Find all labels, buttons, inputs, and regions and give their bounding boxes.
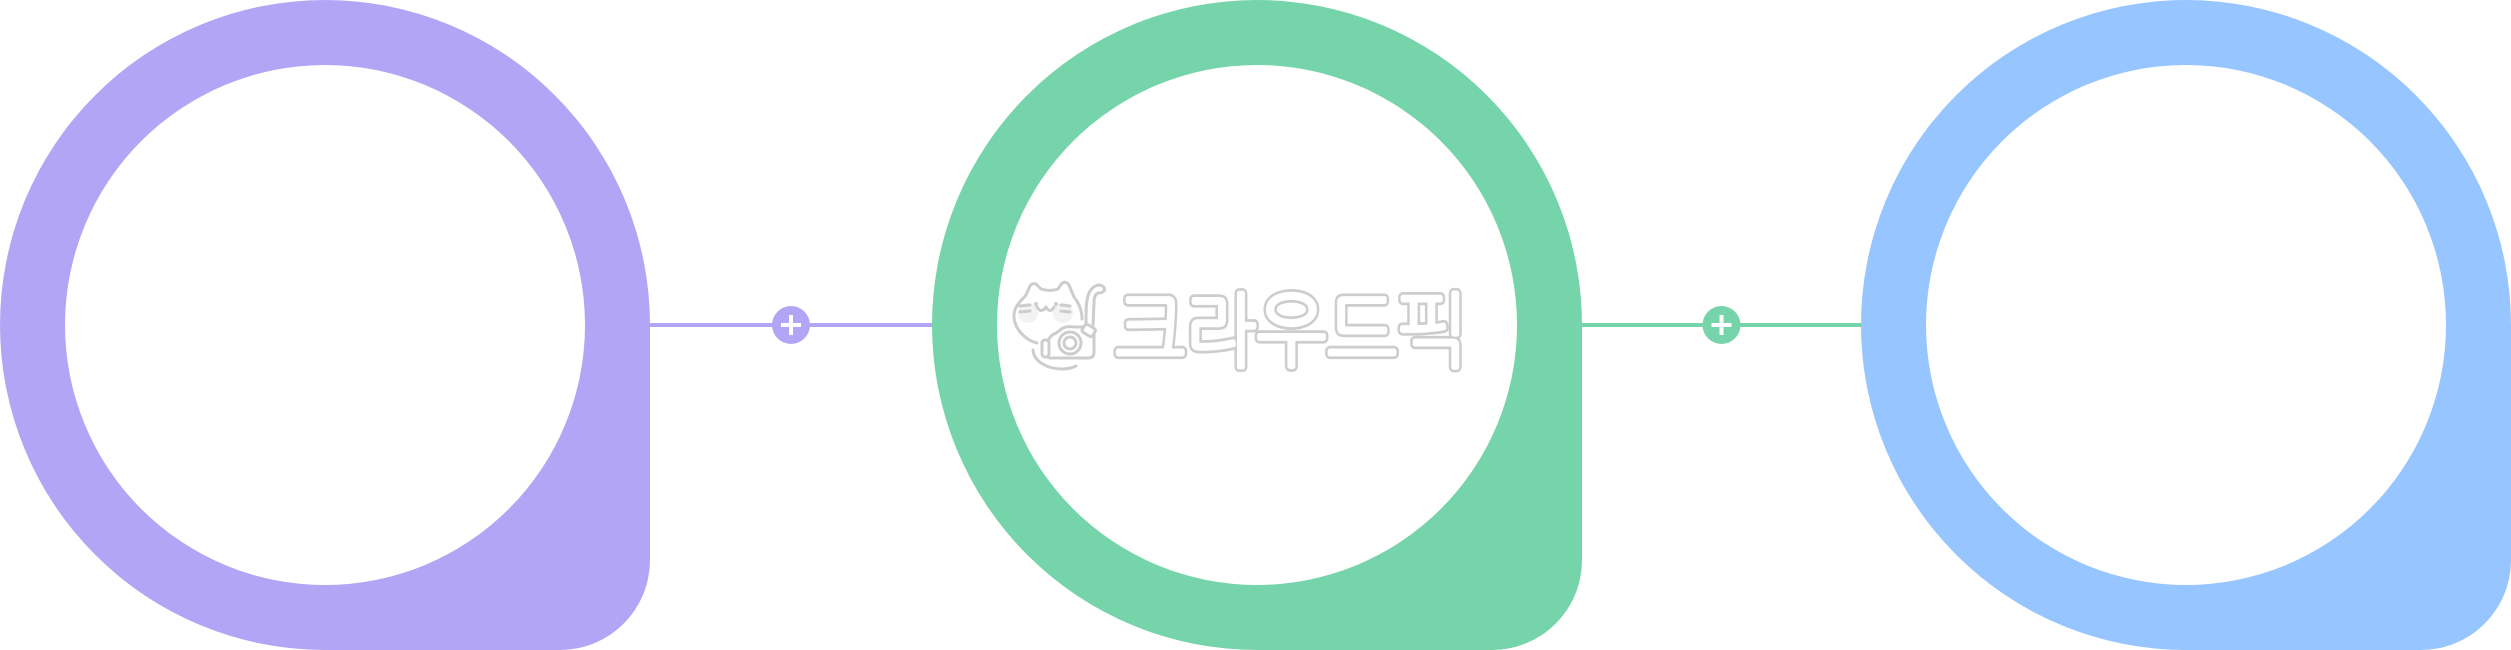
logotype text: 크라우드픽: [1115, 287, 1468, 378]
connector: purple line with plus: [640, 306, 940, 344]
connector: green line with plus: [1572, 306, 1872, 344]
panel: blue teardrop: [1861, 0, 2511, 650]
panel: green teardrop: [932, 0, 1582, 650]
icon: cat with camera: [1014, 282, 1104, 369]
logotype text: 크라우드픽: [1115, 287, 1468, 378]
panel: purple teardrop: [0, 0, 650, 650]
